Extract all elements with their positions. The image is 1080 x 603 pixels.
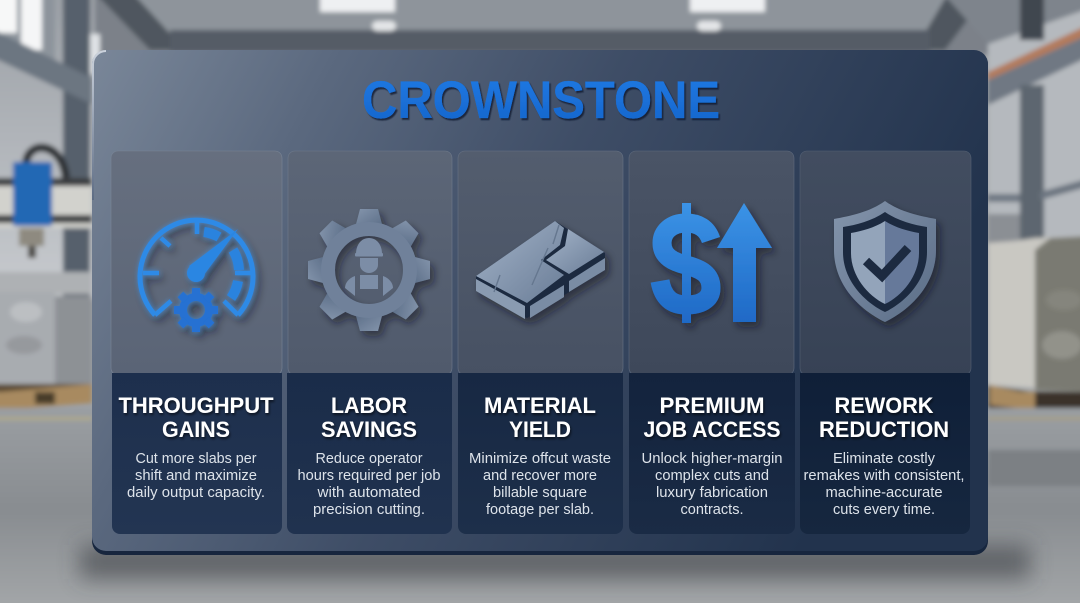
icon: worker silhouette [345,238,393,296]
text block: complex cuts and [655,468,769,484]
title: CROWNSTONE [362,71,720,130]
heading: YIELD [509,417,571,442]
icon: gear with worker [308,209,430,331]
right wall [988,0,1080,300]
text block [642,451,782,518]
text block: Cut more slabs per [136,451,257,467]
text block [469,451,611,518]
heading [819,393,949,442]
text block: Reduce operator [316,451,423,467]
heading: REWORK [834,393,934,418]
heading: SAVINGS [321,417,417,442]
text block: Minimize offcut waste [469,451,611,467]
icon: cracked stone slab [476,221,605,319]
heading: JOB ACCESS [644,417,780,442]
text block: footage per slab. [486,502,594,518]
text block: shift and maximize [135,468,257,484]
left marble block [0,292,55,384]
text block: remakes with consistent, [804,468,964,484]
heading: MATERIAL [484,393,596,418]
text block: luxury fabrication [656,485,768,501]
heading [644,393,780,442]
text block: Eliminate costly [833,451,936,467]
panel: labor savings [287,151,452,534]
heading: GAINS [162,417,230,442]
text block [127,451,265,501]
panel: throughput gains [111,151,282,534]
CNC machine [26,148,66,178]
text block [804,451,964,518]
text block: Unlock higher-margin [642,451,782,467]
panel: premium job access [629,151,795,534]
right marble block [988,236,1080,392]
text block: and recover more [483,468,597,484]
heading [321,393,417,442]
text block: machine-accurate [826,485,942,501]
heading: PREMIUM [660,393,764,418]
text block: billable square [493,485,587,501]
heading [484,393,596,442]
panel: main board [92,50,988,555]
heading: REDUCTION [819,417,949,442]
text block: with automated [316,485,420,501]
text block [298,451,440,518]
panel: rework reduction [800,151,971,534]
left wall [0,0,95,300]
heading [118,393,274,442]
floor [0,408,1080,603]
icon: dollar and up arrow [660,203,772,323]
text block: hours required per job [298,468,440,484]
text block: cuts every time. [833,502,935,518]
text block: precision cutting. [313,502,425,518]
heading: THROUGHPUT [118,393,274,418]
text block: contracts. [680,502,744,518]
icon: speedometer with gear [140,218,253,332]
text block: daily output capacity. [127,485,265,501]
panel: material yield [458,151,623,534]
heading: LABOR [331,393,407,418]
icon: shield with check [834,201,936,322]
